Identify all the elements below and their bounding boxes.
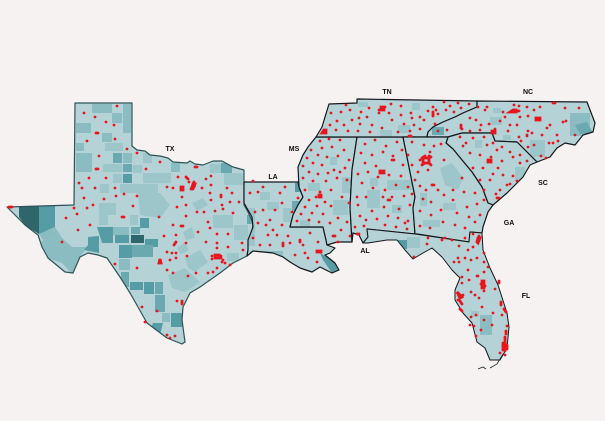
state: Alabama with counties <box>350 137 415 243</box>
label: TN: TN <box>382 89 392 96</box>
state labels <box>166 89 548 300</box>
facility dots: Tennessee <box>322 102 469 136</box>
facility dots: Alabama <box>355 140 410 234</box>
label: NC: NC <box>523 89 533 96</box>
state: Georgia with counties <box>403 137 493 242</box>
label: GA: GA <box>504 220 514 227</box>
facility dots: South Carolina <box>460 137 527 198</box>
label: FL: FL <box>522 293 531 300</box>
state: Mississippi with counties <box>290 137 357 245</box>
state: Tennessee with counties <box>316 99 477 137</box>
state: Florida with counties <box>363 229 509 369</box>
label: MS: MS <box>289 146 300 153</box>
state: Texas with counties <box>7 103 253 344</box>
state: Louisiana with parishes <box>244 182 339 273</box>
label: SC: SC <box>538 180 548 187</box>
label: LA: LA <box>268 174 278 181</box>
facility dots: Texas <box>9 106 243 338</box>
facility dots: Florida <box>414 238 507 355</box>
label: TX: TX <box>166 146 175 153</box>
facility dots: Mississippi <box>297 139 350 242</box>
map of southern states <box>6 89 596 370</box>
facility dots: Louisiana <box>250 181 321 262</box>
map artwork <box>7 89 595 369</box>
label: AL: AL <box>360 248 370 255</box>
state: South Carolina with counties <box>446 133 537 205</box>
facility dots: North Carolina <box>438 103 579 158</box>
facility dots: Georgia <box>408 142 484 236</box>
state: North Carolina with counties <box>427 101 595 162</box>
